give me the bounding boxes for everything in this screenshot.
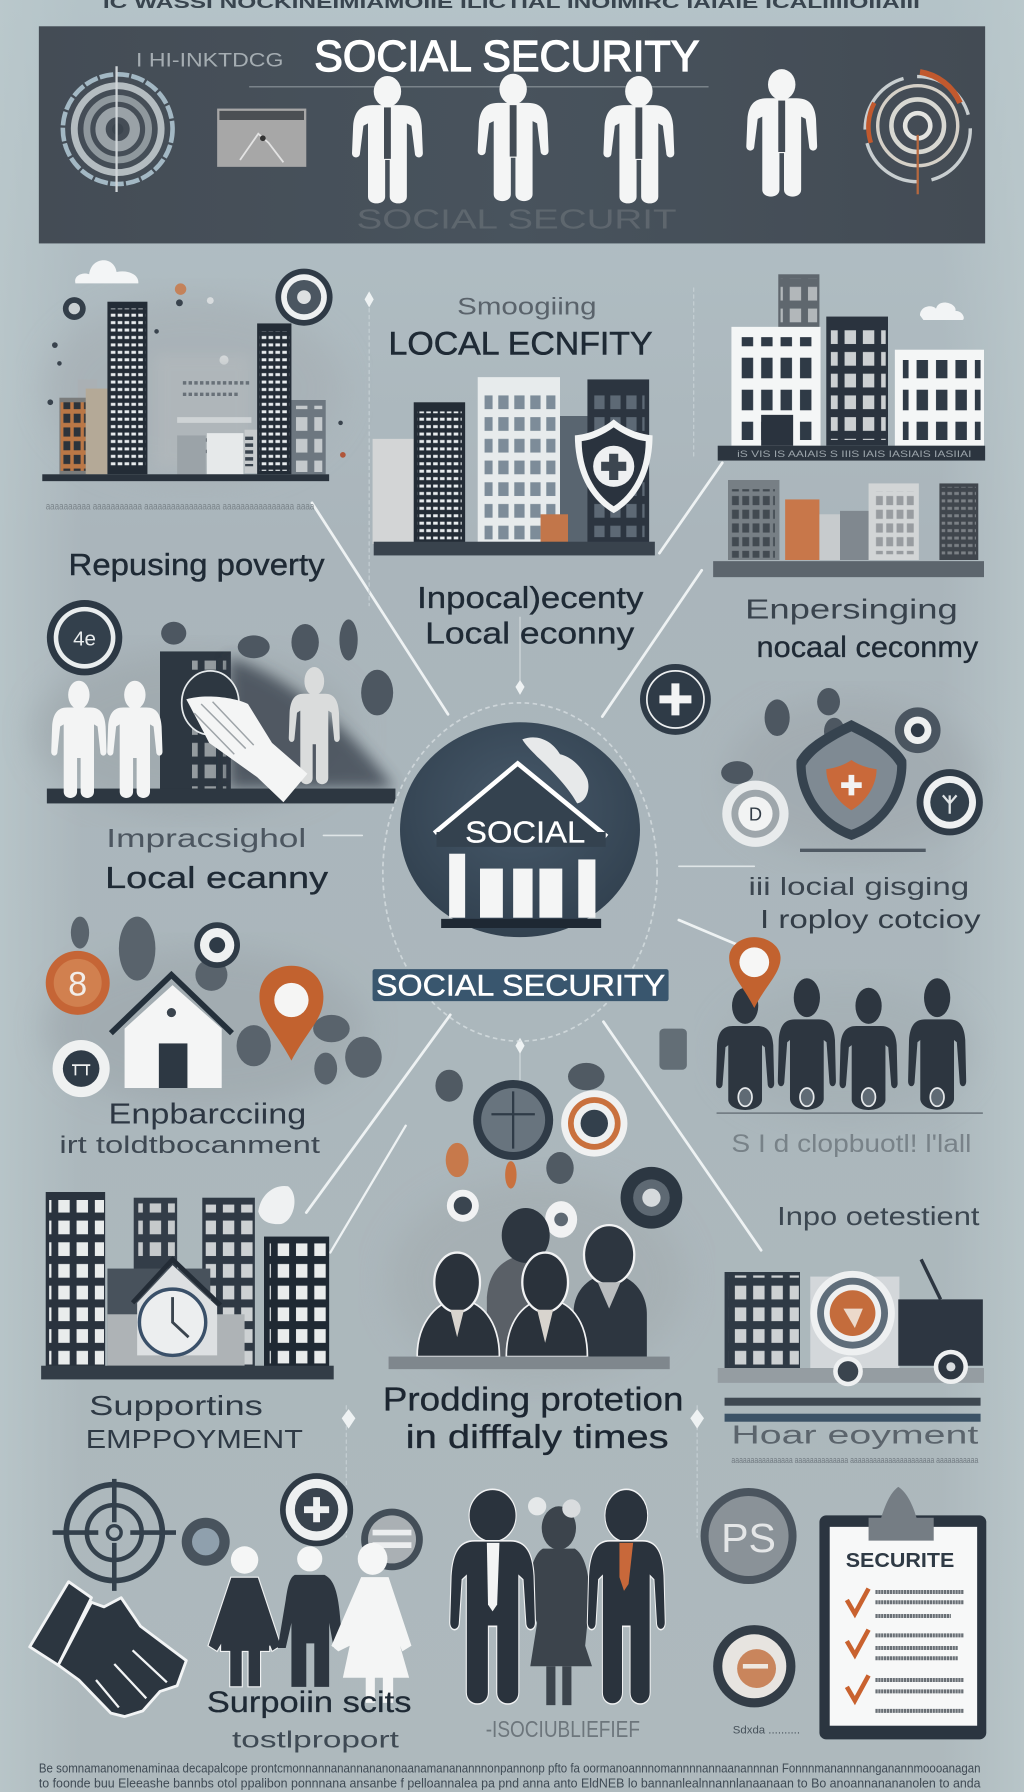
side icon bbox=[659, 1029, 687, 1070]
icon: ring right bbox=[917, 769, 983, 835]
heading small: Smoogiing bbox=[457, 293, 597, 320]
text: house caption bbox=[59, 1098, 320, 1159]
icon: ring badge bbox=[47, 600, 122, 675]
icon: white small ring bbox=[194, 922, 240, 968]
footer text: to foonde buu Eleeashe bannbs otol ppalibon ponnnana ansanbe f pelloannalea pa pnd anna anto EldNEB lo bannanlealnnannlanaanaan to Bo anoannanananolen to anda bbox=[39, 1776, 981, 1790]
right man bbox=[587, 1489, 665, 1704]
icon: small ring badge bbox=[63, 297, 86, 320]
text: right caption: nocaal ceconmy bbox=[757, 631, 978, 664]
mid block bbox=[107, 1269, 210, 1367]
icon: ring badge: 4e bbox=[73, 628, 96, 651]
icon: white ring bbox=[53, 1040, 110, 1097]
icon: ring top bbox=[895, 707, 941, 753]
wheels bbox=[833, 1350, 968, 1386]
text: left caption second row bbox=[105, 823, 329, 895]
banner title: SOCIAL SECURITY bbox=[314, 33, 699, 81]
ring panel bbox=[810, 1271, 899, 1368]
base bbox=[389, 1357, 670, 1369]
icon: cloud bbox=[75, 260, 138, 283]
text: center top caption: Local econny bbox=[425, 615, 635, 650]
label: social security: SOCIAL SECURITY bbox=[376, 969, 665, 1002]
woman bbox=[528, 1506, 592, 1705]
icon: plus ring bbox=[280, 1473, 353, 1546]
white tie bbox=[487, 1543, 499, 1611]
cloud bbox=[920, 302, 964, 320]
text: center top caption: Inpocal)ecenty bbox=[417, 580, 644, 615]
panel: shield cluster bbox=[721, 688, 983, 850]
left pale building bbox=[373, 439, 414, 544]
second dark tower bbox=[257, 323, 291, 474]
icon: orange pin bbox=[729, 937, 781, 1008]
icon: hand bbox=[182, 671, 307, 802]
tower two bbox=[134, 1198, 177, 1367]
text: right caption second row: I roploy cotcioy bbox=[760, 904, 982, 934]
icon: ring left: D bbox=[749, 804, 762, 825]
text: right caption bbox=[745, 593, 978, 664]
shelf bbox=[47, 789, 395, 803]
text: lower left caption: Supportins bbox=[89, 1390, 263, 1421]
clipboard title: SECURITE bbox=[846, 1549, 954, 1572]
orange box bbox=[541, 514, 568, 544]
icon: house bbox=[111, 975, 232, 1088]
text: lower left caption bbox=[86, 1390, 303, 1454]
icon: orange dial bbox=[713, 1625, 795, 1707]
white block right bbox=[895, 350, 984, 446]
emblem halo ring bbox=[383, 703, 657, 1041]
icon: left target bbox=[63, 66, 173, 192]
scattered specks bbox=[47, 283, 346, 458]
emblem word: SOCIAL bbox=[465, 814, 585, 849]
tower one bbox=[46, 1192, 105, 1367]
emblem disc bbox=[400, 722, 640, 937]
shelf bbox=[41, 1366, 334, 1379]
right person bbox=[574, 1225, 647, 1357]
panel: bottom center people bbox=[450, 1489, 665, 1742]
door bbox=[761, 415, 793, 446]
header people bbox=[352, 69, 817, 203]
icon: orange dial bbox=[561, 1090, 627, 1157]
people bbox=[51, 667, 340, 798]
icon: striped ring bbox=[361, 1509, 423, 1570]
shelf with text bbox=[718, 446, 985, 461]
text: right caption second row: iii locial gisging bbox=[749, 873, 969, 901]
icon: crosshair target bbox=[53, 1479, 176, 1591]
panel: bottom left handshake bbox=[30, 1473, 423, 1752]
icon: shield bbox=[575, 419, 653, 513]
white block left bbox=[731, 327, 821, 446]
family: right person bbox=[331, 1543, 411, 1703]
footer text bbox=[39, 1762, 981, 1790]
left man bbox=[450, 1489, 535, 1704]
family: center person bbox=[278, 1546, 343, 1687]
text: house caption: Enpbarcciing bbox=[109, 1098, 306, 1130]
shelf micro text: iS VIS IS AAIAIS S IIIS IAIS IASIAIS IASIIAI bbox=[737, 449, 971, 459]
icon: ring left bbox=[722, 781, 789, 847]
icon: right target bbox=[865, 72, 970, 194]
panel: house cluster bbox=[46, 917, 382, 1097]
mid buildings bbox=[819, 483, 919, 560]
panel: center top local economy bbox=[373, 293, 655, 555]
clipboard board bbox=[819, 1515, 986, 1739]
dark building bbox=[939, 483, 978, 560]
leaves bbox=[161, 619, 393, 715]
caption: Surpoiin scits bbox=[207, 1686, 411, 1719]
icon: gray dial bbox=[701, 1488, 797, 1584]
small buildings bbox=[59, 379, 326, 474]
dark block bbox=[826, 317, 888, 446]
dark building bbox=[160, 651, 231, 794]
icon: note card bbox=[217, 109, 306, 167]
shelf bbox=[42, 474, 329, 481]
connector diamonds bbox=[342, 291, 704, 1429]
tower three bbox=[202, 1198, 255, 1367]
family: left person bbox=[208, 1546, 281, 1687]
icon: small rings bbox=[447, 1190, 577, 1238]
back person bbox=[487, 1208, 561, 1357]
text: left caption second row: Local ecanny bbox=[105, 860, 329, 895]
icon: handshake bbox=[30, 1582, 186, 1717]
white connector lines bbox=[306, 288, 761, 1537]
icon: cloud bbox=[258, 1186, 294, 1224]
panel: people group right bbox=[659, 937, 983, 1158]
icon: ring badge bbox=[275, 269, 333, 326]
panel: city lower left bbox=[41, 1186, 334, 1379]
text: center lower caption: in difffaly times bbox=[406, 1419, 669, 1456]
faded caption: aaaaaaaaaa aaaaaaaaaaa aaaaaaaaaaaaaaaaa aaaaaaaaaaaaaaaa aaaa bbox=[46, 502, 315, 513]
icon: orange ring: 8 bbox=[68, 965, 87, 1003]
caption second line: tostlproport bbox=[232, 1726, 400, 1752]
small icons bbox=[528, 1497, 581, 1518]
header banner bbox=[39, 26, 985, 243]
panel: city top left bbox=[42, 260, 346, 513]
heading: Repusing poverty: Repusing poverty bbox=[69, 547, 325, 582]
baseline bbox=[800, 849, 926, 852]
right dark building bbox=[587, 379, 649, 544]
banner bars bbox=[725, 1398, 981, 1422]
truck body bbox=[898, 1299, 983, 1366]
text: lower left caption: EMPPOYMENT bbox=[86, 1424, 303, 1454]
icon: shield bbox=[796, 720, 906, 840]
left front person bbox=[417, 1253, 499, 1357]
faint caption: Sdxda .......... bbox=[733, 1725, 800, 1737]
base bbox=[441, 919, 601, 928]
heading: Inpo oetestient bbox=[777, 1201, 980, 1231]
panel: city top right bbox=[718, 274, 985, 461]
orange building bbox=[785, 499, 819, 560]
grey building bbox=[560, 416, 590, 544]
text: house caption: irt toldtbocanment bbox=[59, 1132, 320, 1159]
building bbox=[725, 1272, 800, 1368]
text: right caption second row bbox=[749, 873, 982, 934]
white building bbox=[478, 377, 560, 543]
faded caption: S I d clopbuotl! l'lall bbox=[731, 1130, 971, 1158]
icon: plus ring bbox=[640, 664, 711, 735]
header ties bbox=[384, 101, 785, 159]
clock house bbox=[107, 1259, 245, 1366]
shelf bbox=[713, 561, 984, 577]
checklist item 1 bbox=[847, 1589, 963, 1616]
checklist item 3 bbox=[847, 1675, 963, 1711]
dark shading bbox=[229, 657, 394, 789]
panel: truck and building bbox=[718, 1201, 984, 1465]
text: left caption second row: Impracsighol bbox=[106, 823, 306, 853]
checklist item 2 bbox=[847, 1630, 963, 1658]
dark tower bbox=[414, 402, 465, 544]
tall dark tower bbox=[107, 302, 147, 474]
center emblem bbox=[383, 703, 657, 1041]
leaves bbox=[71, 917, 382, 1085]
icon: gray dial: PS bbox=[721, 1515, 776, 1561]
panel: bottom right badges and clipboard bbox=[701, 1487, 986, 1739]
roof bbox=[434, 763, 607, 837]
text: center lower caption: Prodding protetion bbox=[383, 1381, 683, 1418]
icon: small ring bbox=[182, 1518, 230, 1566]
text: right caption: Enpersinging bbox=[745, 593, 958, 624]
icon: orange ring bbox=[46, 951, 110, 1015]
right front person bbox=[506, 1253, 587, 1357]
dark people bbox=[716, 978, 966, 1110]
connector line bbox=[249, 86, 709, 88]
banner small label: I HI-INKTDCG bbox=[136, 49, 283, 71]
panel: city lower right bbox=[713, 480, 984, 577]
icon: orange pin bbox=[259, 966, 323, 1061]
clipboard paper bbox=[830, 1527, 977, 1726]
shelf bbox=[374, 542, 655, 555]
leaves bbox=[435, 1063, 605, 1189]
panel: hand and people bbox=[47, 600, 395, 803]
panel: center group lower bbox=[389, 1063, 682, 1369]
mast bbox=[921, 1259, 941, 1299]
clipboard clip bbox=[869, 1487, 934, 1541]
heading large: LOCAL ECNFITY bbox=[389, 325, 653, 361]
leaves bbox=[721, 688, 845, 784]
faded caption: -ISOCIUBLIEFIEF bbox=[486, 1716, 640, 1742]
icon: dark ring bbox=[621, 1167, 682, 1229]
tower four bbox=[264, 1237, 329, 1367]
banner text: Hoar eoyment bbox=[731, 1419, 979, 1449]
feet rings bbox=[738, 1088, 944, 1106]
icon: dark dial bbox=[473, 1080, 553, 1160]
shelf bbox=[718, 1368, 984, 1383]
text: center top caption bbox=[417, 580, 644, 650]
gray building bbox=[728, 480, 779, 560]
faded banner caption: SOCIAL SECURIT bbox=[357, 204, 677, 235]
text: center lower caption bbox=[383, 1381, 683, 1456]
columns bbox=[449, 854, 595, 918]
faded civic scene bbox=[154, 354, 261, 474]
orange tie bbox=[619, 1543, 633, 1591]
baseline bbox=[717, 1112, 983, 1114]
gray rear tower bbox=[778, 274, 819, 331]
map blob bbox=[522, 737, 588, 803]
